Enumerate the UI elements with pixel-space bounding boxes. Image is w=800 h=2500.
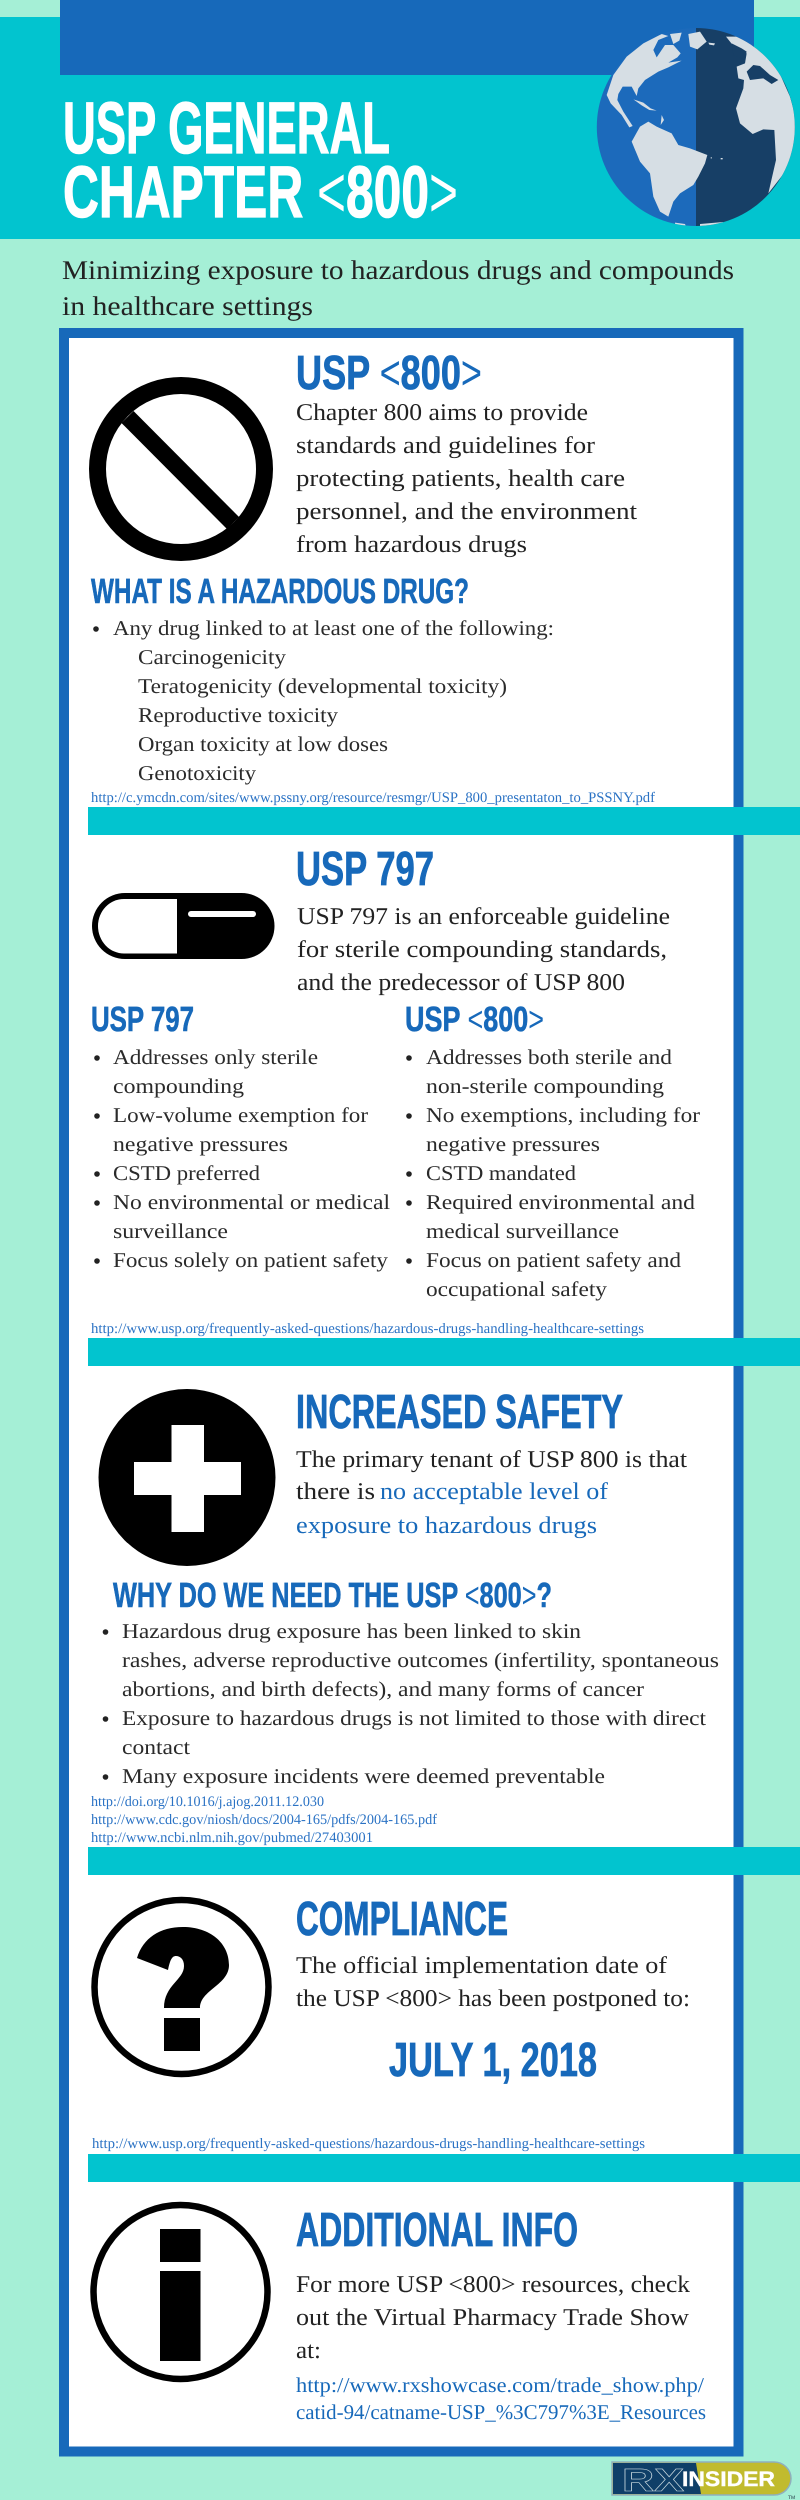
icon: information bbox=[94, 2205, 268, 2379]
intro paragraph: from hazardous drugs bbox=[296, 532, 527, 558]
column bullets bbox=[406, 1045, 700, 1301]
reasons list: Many exposure incidents were deemed preventable bbox=[122, 1764, 605, 1788]
column: USP 800 bbox=[405, 1000, 700, 1301]
column bullets: surveillance bbox=[113, 1219, 228, 1243]
column heading: USP <800> bbox=[405, 1000, 544, 1039]
heading: additional info: ADDITIONAL INFO bbox=[296, 2204, 578, 2257]
intro paragraph: at: bbox=[296, 2338, 321, 2364]
section: USP 797 bbox=[91, 843, 700, 1337]
column bullets: medical surveillance bbox=[426, 1219, 619, 1243]
reasons list: abortions, and birth defects), and many forms of cancer bbox=[122, 1677, 644, 1701]
hazardous drug list: Genotoxicity bbox=[138, 761, 257, 785]
icon: question mark bbox=[94, 1900, 268, 2074]
intro paragraph: for sterile compounding standards, bbox=[297, 937, 667, 963]
intro paragraph: and the predecessor of USP 800 bbox=[297, 970, 625, 996]
reasons list bbox=[103, 1619, 719, 1788]
icon: globe bbox=[596, 28, 798, 228]
column bullets: CSTD preferred bbox=[113, 1161, 261, 1185]
column bullets: Low-volume exemption for bbox=[113, 1103, 368, 1127]
intro paragraph: The primary tenant of USP 800 is that bbox=[296, 1447, 687, 1473]
section: increased safety bbox=[91, 1386, 719, 1846]
divider band 4 bbox=[88, 2154, 800, 2182]
column heading: USP 797 bbox=[91, 1000, 194, 1039]
panel: main card frame bbox=[64, 333, 738, 2452]
divider band 3 bbox=[88, 1847, 800, 1875]
intro paragraph bbox=[296, 1447, 687, 1539]
hazardous drug list: Organ toxicity at low doses bbox=[138, 732, 388, 756]
column bullets: occupational safety bbox=[426, 1277, 608, 1301]
column bullets: CSTD mandated bbox=[426, 1161, 577, 1185]
source links: http://doi.org/10.1016/j.ajog.2011.12.030 bbox=[91, 1794, 324, 1810]
section: compliance bbox=[92, 1893, 690, 2152]
title bbox=[63, 88, 458, 233]
column bullets: compounding bbox=[113, 1074, 245, 1098]
subtitle: in healthcare settings bbox=[62, 291, 313, 321]
column bullets: Addresses only sterile bbox=[113, 1045, 318, 1069]
column: USP 797 bbox=[91, 1000, 390, 1272]
icon: medical cross bbox=[98, 1389, 276, 1566]
intro paragraph: exposure to hazardous drugs bbox=[296, 1513, 597, 1539]
logo: Rx Insider: RX bbox=[622, 2462, 685, 2498]
heading: increased safety: INCREASED SAFETY bbox=[296, 1386, 623, 1439]
source links: http://www.ncbi.nlm.nih.gov/pubmed/27403001 bbox=[91, 1830, 373, 1846]
resource link bbox=[296, 2373, 706, 2424]
source links: http://www.cdc.gov/niosh/docs/2004-165/pdfs/2004-165.pdf bbox=[91, 1812, 437, 1828]
heading: what is a hazardous drug: WHAT IS A HAZARDOUS DRUG? bbox=[91, 572, 469, 611]
subtitle: Minimizing exposure to hazardous drugs and compounds bbox=[62, 255, 734, 285]
heading: USP 797: USP 797 bbox=[296, 843, 434, 896]
column bullets: Focus solely on patient safety bbox=[113, 1248, 389, 1272]
column bullets: No exemptions, including for bbox=[426, 1103, 700, 1127]
intro paragraph bbox=[296, 2272, 690, 2364]
column bullets: negative pressures bbox=[426, 1132, 600, 1156]
intro paragraph bbox=[296, 1953, 690, 2012]
heading: compliance: COMPLIANCE bbox=[296, 1893, 508, 1946]
title: USP GENERAL bbox=[63, 88, 390, 169]
section: USP 800 bbox=[91, 347, 655, 806]
reasons list: rashes, adverse reproductive outcomes (infertility, spontaneous bbox=[122, 1648, 719, 1672]
intro paragraph: USP 797 is an enforceable guideline bbox=[297, 904, 670, 930]
resource link: catid-94/catname-USP_%3C797%3E_Resources bbox=[296, 2400, 706, 2424]
key date: JULY 1, 2018 bbox=[389, 2034, 597, 2087]
source link: http://www.usp.org/frequently-asked-questions/hazardous-drugs-handling-healthcare-settings bbox=[91, 1321, 644, 1337]
column bullets: Required environmental and bbox=[426, 1190, 696, 1214]
intro paragraph bbox=[297, 904, 670, 996]
logo: Rx Insider bbox=[612, 2462, 795, 2500]
column bullets: negative pressures bbox=[113, 1132, 288, 1156]
reasons list: contact bbox=[122, 1735, 190, 1759]
intro paragraph: standards and guidelines for bbox=[296, 433, 595, 459]
subtitle bbox=[62, 255, 734, 321]
column bullets: non-sterile compounding bbox=[426, 1074, 665, 1098]
source link: http://www.usp.org/frequently-asked-questions/hazardous-drugs-handling-healthcare-settings bbox=[92, 2136, 645, 2152]
intro paragraph: The official implementation date of bbox=[296, 1953, 667, 1979]
section: additional info bbox=[94, 2204, 706, 2424]
intro paragraph: protecting patients, health care bbox=[296, 466, 625, 492]
intro paragraph: personnel, and the environment bbox=[296, 499, 637, 525]
heading: USP 800: USP <800> bbox=[296, 347, 482, 400]
heading: why do we need: WHY DO WE NEED THE USP <800>? bbox=[113, 1576, 552, 1615]
column bullets: No environmental or medical bbox=[113, 1190, 390, 1214]
resource link: http://www.rxshowcase.com/trade_show.php/ bbox=[296, 2373, 704, 2397]
logo: Rx Insider: INSIDER bbox=[682, 2468, 775, 2491]
intro paragraph: there is bbox=[296, 1479, 375, 1505]
hazardous drug list: Reproductive toxicity bbox=[138, 703, 339, 727]
intro paragraph: Chapter 800 aims to provide bbox=[296, 400, 588, 426]
intro paragraph: no acceptable level of bbox=[380, 1479, 608, 1505]
column bullets: Addresses both sterile and bbox=[426, 1045, 673, 1069]
column bullets: Focus on patient safety and bbox=[426, 1248, 682, 1272]
hazardous drug list: Teratogenicity (developmental toxicity) bbox=[138, 674, 507, 698]
intro paragraph: the USP <800> has been postponed to: bbox=[296, 1986, 690, 2012]
header banner bbox=[0, 0, 800, 239]
icon: capsule bbox=[92, 893, 274, 959]
intro paragraph bbox=[296, 400, 637, 558]
hazardous drug list: Carcinogenicity bbox=[138, 645, 287, 669]
intro paragraph: out the Virtual Pharmacy Trade Show bbox=[296, 2305, 690, 2331]
source link: http://c.ymcdn.com/sites/www.pssny.org/resource/resmgr/USP_800_presentaton_to_PSSNY.pdf bbox=[91, 790, 655, 806]
title: CHAPTER <800> bbox=[63, 152, 458, 233]
divider band 2 bbox=[88, 1338, 800, 1366]
intro paragraph: For more USP <800> resources, check bbox=[296, 2272, 690, 2298]
column bullets bbox=[94, 1045, 390, 1272]
hazardous drug list: Any drug linked to at least one of the following: bbox=[113, 616, 554, 640]
hazardous drug list bbox=[93, 616, 554, 785]
divider band 1 bbox=[88, 807, 800, 835]
icon: prohibition sign bbox=[98, 386, 264, 552]
reasons list: Exposure to hazardous drugs is not limited to those with direct bbox=[122, 1706, 706, 1730]
source links bbox=[91, 1794, 437, 1846]
reasons list: Hazardous drug exposure has been linked to skin bbox=[122, 1619, 582, 1643]
